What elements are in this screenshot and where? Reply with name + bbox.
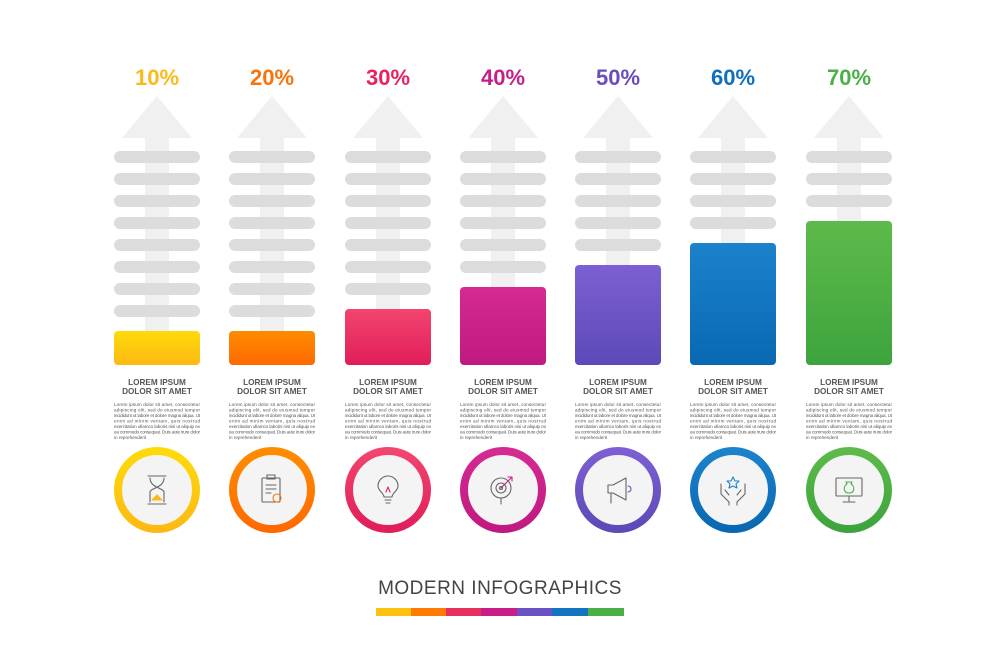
- footer title: MODERN INFOGRAPHICS: [378, 578, 622, 599]
- heading: LOREM IPSUM: [474, 378, 532, 387]
- paragraph: Lorem ipsum dolor sit amet, consectetur: [575, 402, 661, 407]
- icon circle: megaphone: [579, 451, 657, 529]
- heading: DOLOR SIT AMET: [583, 387, 653, 396]
- paragraph: in reprehenderit: [806, 435, 839, 440]
- arrow: [122, 96, 192, 365]
- bar: [806, 221, 892, 365]
- placeholder lines: [806, 151, 892, 207]
- paragraph: enim ad minim veniam, quis nostrud: [806, 418, 892, 424]
- paragraph: enim ad minim veniam, quis nostrud: [229, 418, 315, 424]
- bar: [229, 331, 315, 365]
- heading: LOREM IPSUM: [589, 378, 647, 387]
- paragraph: in reprehenderit: [575, 435, 608, 440]
- paragraph: adipiscing elit, sed do eiusmod tempor: [806, 408, 892, 412]
- paragraph: Lorem ipsum dolor sit amet, consectetur: [114, 402, 200, 407]
- paragraph: incididunt ut labore et dolore magna aliqua. Ut: [575, 413, 662, 418]
- placeholder lines: [575, 151, 661, 251]
- arrow: [583, 96, 653, 365]
- placeholder lines: [690, 151, 776, 229]
- paragraph: in reprehenderit: [229, 435, 262, 440]
- paragraph: Lorem ipsum dolor sit amet, consectetur: [806, 402, 892, 407]
- paragraph: exercitation ullamco laboris nisi ut aliquip ex: [345, 424, 432, 429]
- heading: DOLOR SIT AMET: [814, 387, 884, 396]
- column 1: 10%: [114, 65, 201, 529]
- paragraph: exercitation ullamco laboris nisi ut aliquip ex: [114, 424, 201, 429]
- heading: LOREM IPSUM: [128, 378, 186, 387]
- bar: [690, 243, 776, 365]
- placeholder lines: [114, 151, 200, 317]
- arrow: [814, 96, 884, 365]
- paragraph: enim ad minim veniam, quis nostrud: [460, 418, 546, 424]
- placeholder lines: [345, 151, 431, 295]
- heading: LOREM IPSUM: [820, 378, 878, 387]
- heading: DOLOR SIT AMET: [468, 387, 538, 396]
- paragraph: in reprehenderit: [460, 435, 493, 440]
- heading: DOLOR SIT AMET: [237, 387, 307, 396]
- column 5: 50%: [575, 65, 662, 529]
- paragraph: adipiscing elit, sed do eiusmod tempor: [345, 408, 431, 412]
- bar: [114, 331, 200, 365]
- heading: LOREM IPSUM: [243, 378, 301, 387]
- paragraph: incididunt ut labore et dolore magna aliqua. Ut: [806, 413, 893, 418]
- paragraph: enim ad minim veniam, quis nostrud: [690, 418, 776, 424]
- paragraph: adipiscing elit, sed do eiusmod tempor: [460, 408, 546, 412]
- column 7: 70%: [806, 65, 893, 529]
- percent label: 20%: [250, 65, 294, 90]
- arrow: [468, 96, 538, 365]
- paragraph: enim ad minim veniam, quis nostrud: [114, 418, 200, 424]
- paragraph: exercitation ullamco laboris nisi ut aliquip ex: [460, 424, 547, 429]
- icon circle: hands with star: [694, 451, 772, 529]
- icon circle: light bulb: [349, 451, 427, 529]
- heading: DOLOR SIT AMET: [698, 387, 768, 396]
- paragraph: adipiscing elit, sed do eiusmod tempor: [114, 408, 200, 412]
- percent label: 10%: [135, 65, 179, 90]
- color strip: [376, 608, 624, 616]
- paragraph: ea commodo consequat. Duis aute irure dolor: [229, 430, 315, 434]
- arrow: [698, 96, 768, 365]
- heading: DOLOR SIT AMET: [122, 387, 192, 396]
- column 3: 30%: [345, 65, 432, 529]
- paragraph: incididunt ut labore et dolore magna aliqua. Ut: [690, 413, 777, 418]
- paragraph: ea commodo consequat. Duis aute irure dolor: [575, 430, 661, 434]
- paragraph: enim ad minim veniam, quis nostrud: [575, 418, 661, 424]
- paragraph: incididunt ut labore et dolore magna aliqua. Ut: [460, 413, 547, 418]
- icon circle: clipboard: [233, 451, 311, 529]
- bar: [345, 309, 431, 365]
- heading: LOREM IPSUM: [359, 378, 417, 387]
- paragraph: Lorem ipsum dolor sit amet, consectetur: [690, 402, 776, 407]
- paragraph: Lorem ipsum dolor sit amet, consectetur: [460, 402, 546, 407]
- paragraph: exercitation ullamco laboris nisi ut aliquip ex: [806, 424, 893, 429]
- heading: LOREM IPSUM: [704, 378, 762, 387]
- paragraph: adipiscing elit, sed do eiusmod tempor: [575, 408, 661, 412]
- paragraph: incididunt ut labore et dolore magna aliqua. Ut: [345, 413, 432, 418]
- paragraph: incididunt ut labore et dolore magna aliqua. Ut: [114, 413, 201, 418]
- paragraph: Lorem ipsum dolor sit amet, consectetur: [229, 402, 315, 407]
- icon circle: monitor with money bag: [810, 451, 888, 529]
- paragraph: in reprehenderit: [690, 435, 723, 440]
- paragraph: ea commodo consequat. Duis aute irure dolor: [806, 430, 892, 434]
- paragraph: ea commodo consequat. Duis aute irure dolor: [114, 430, 200, 434]
- paragraph: in reprehenderit: [345, 435, 378, 440]
- paragraph: ea commodo consequat. Duis aute irure dolor: [345, 430, 431, 434]
- paragraph: Lorem ipsum dolor sit amet, consectetur: [345, 402, 431, 407]
- bar: [575, 265, 661, 365]
- placeholder lines: [460, 151, 546, 273]
- column 6: 60%: [690, 65, 777, 529]
- paragraph: exercitation ullamco laboris nisi ut aliquip ex: [690, 424, 777, 429]
- paragraph: incididunt ut labore et dolore magna aliqua. Ut: [229, 413, 316, 418]
- percent label: 70%: [827, 65, 871, 90]
- paragraph: exercitation ullamco laboris nisi ut aliquip ex: [575, 424, 662, 429]
- column 2: 20%: [229, 65, 316, 529]
- paragraph: enim ad minim veniam, quis nostrud: [345, 418, 431, 424]
- paragraph: in reprehenderit: [114, 435, 147, 440]
- paragraph: ea commodo consequat. Duis aute irure dolor: [460, 430, 546, 434]
- placeholder lines: [229, 151, 315, 317]
- heading: DOLOR SIT AMET: [353, 387, 423, 396]
- paragraph: adipiscing elit, sed do eiusmod tempor: [690, 408, 776, 412]
- arrow: [353, 96, 423, 365]
- paragraph: ea commodo consequat. Duis aute irure dolor: [690, 430, 776, 434]
- percent label: 60%: [711, 65, 755, 90]
- paragraph: adipiscing elit, sed do eiusmod tempor: [229, 408, 315, 412]
- percent label: 40%: [481, 65, 525, 90]
- paragraph: exercitation ullamco laboris nisi ut aliquip ex: [229, 424, 316, 429]
- bar: [460, 287, 546, 365]
- percent label: 30%: [366, 65, 410, 90]
- icon circle: target: [464, 451, 542, 529]
- column 4: 40%: [460, 65, 547, 529]
- icon circle: hourglass: [118, 451, 196, 529]
- arrow: [237, 96, 307, 365]
- percent label: 50%: [596, 65, 640, 90]
